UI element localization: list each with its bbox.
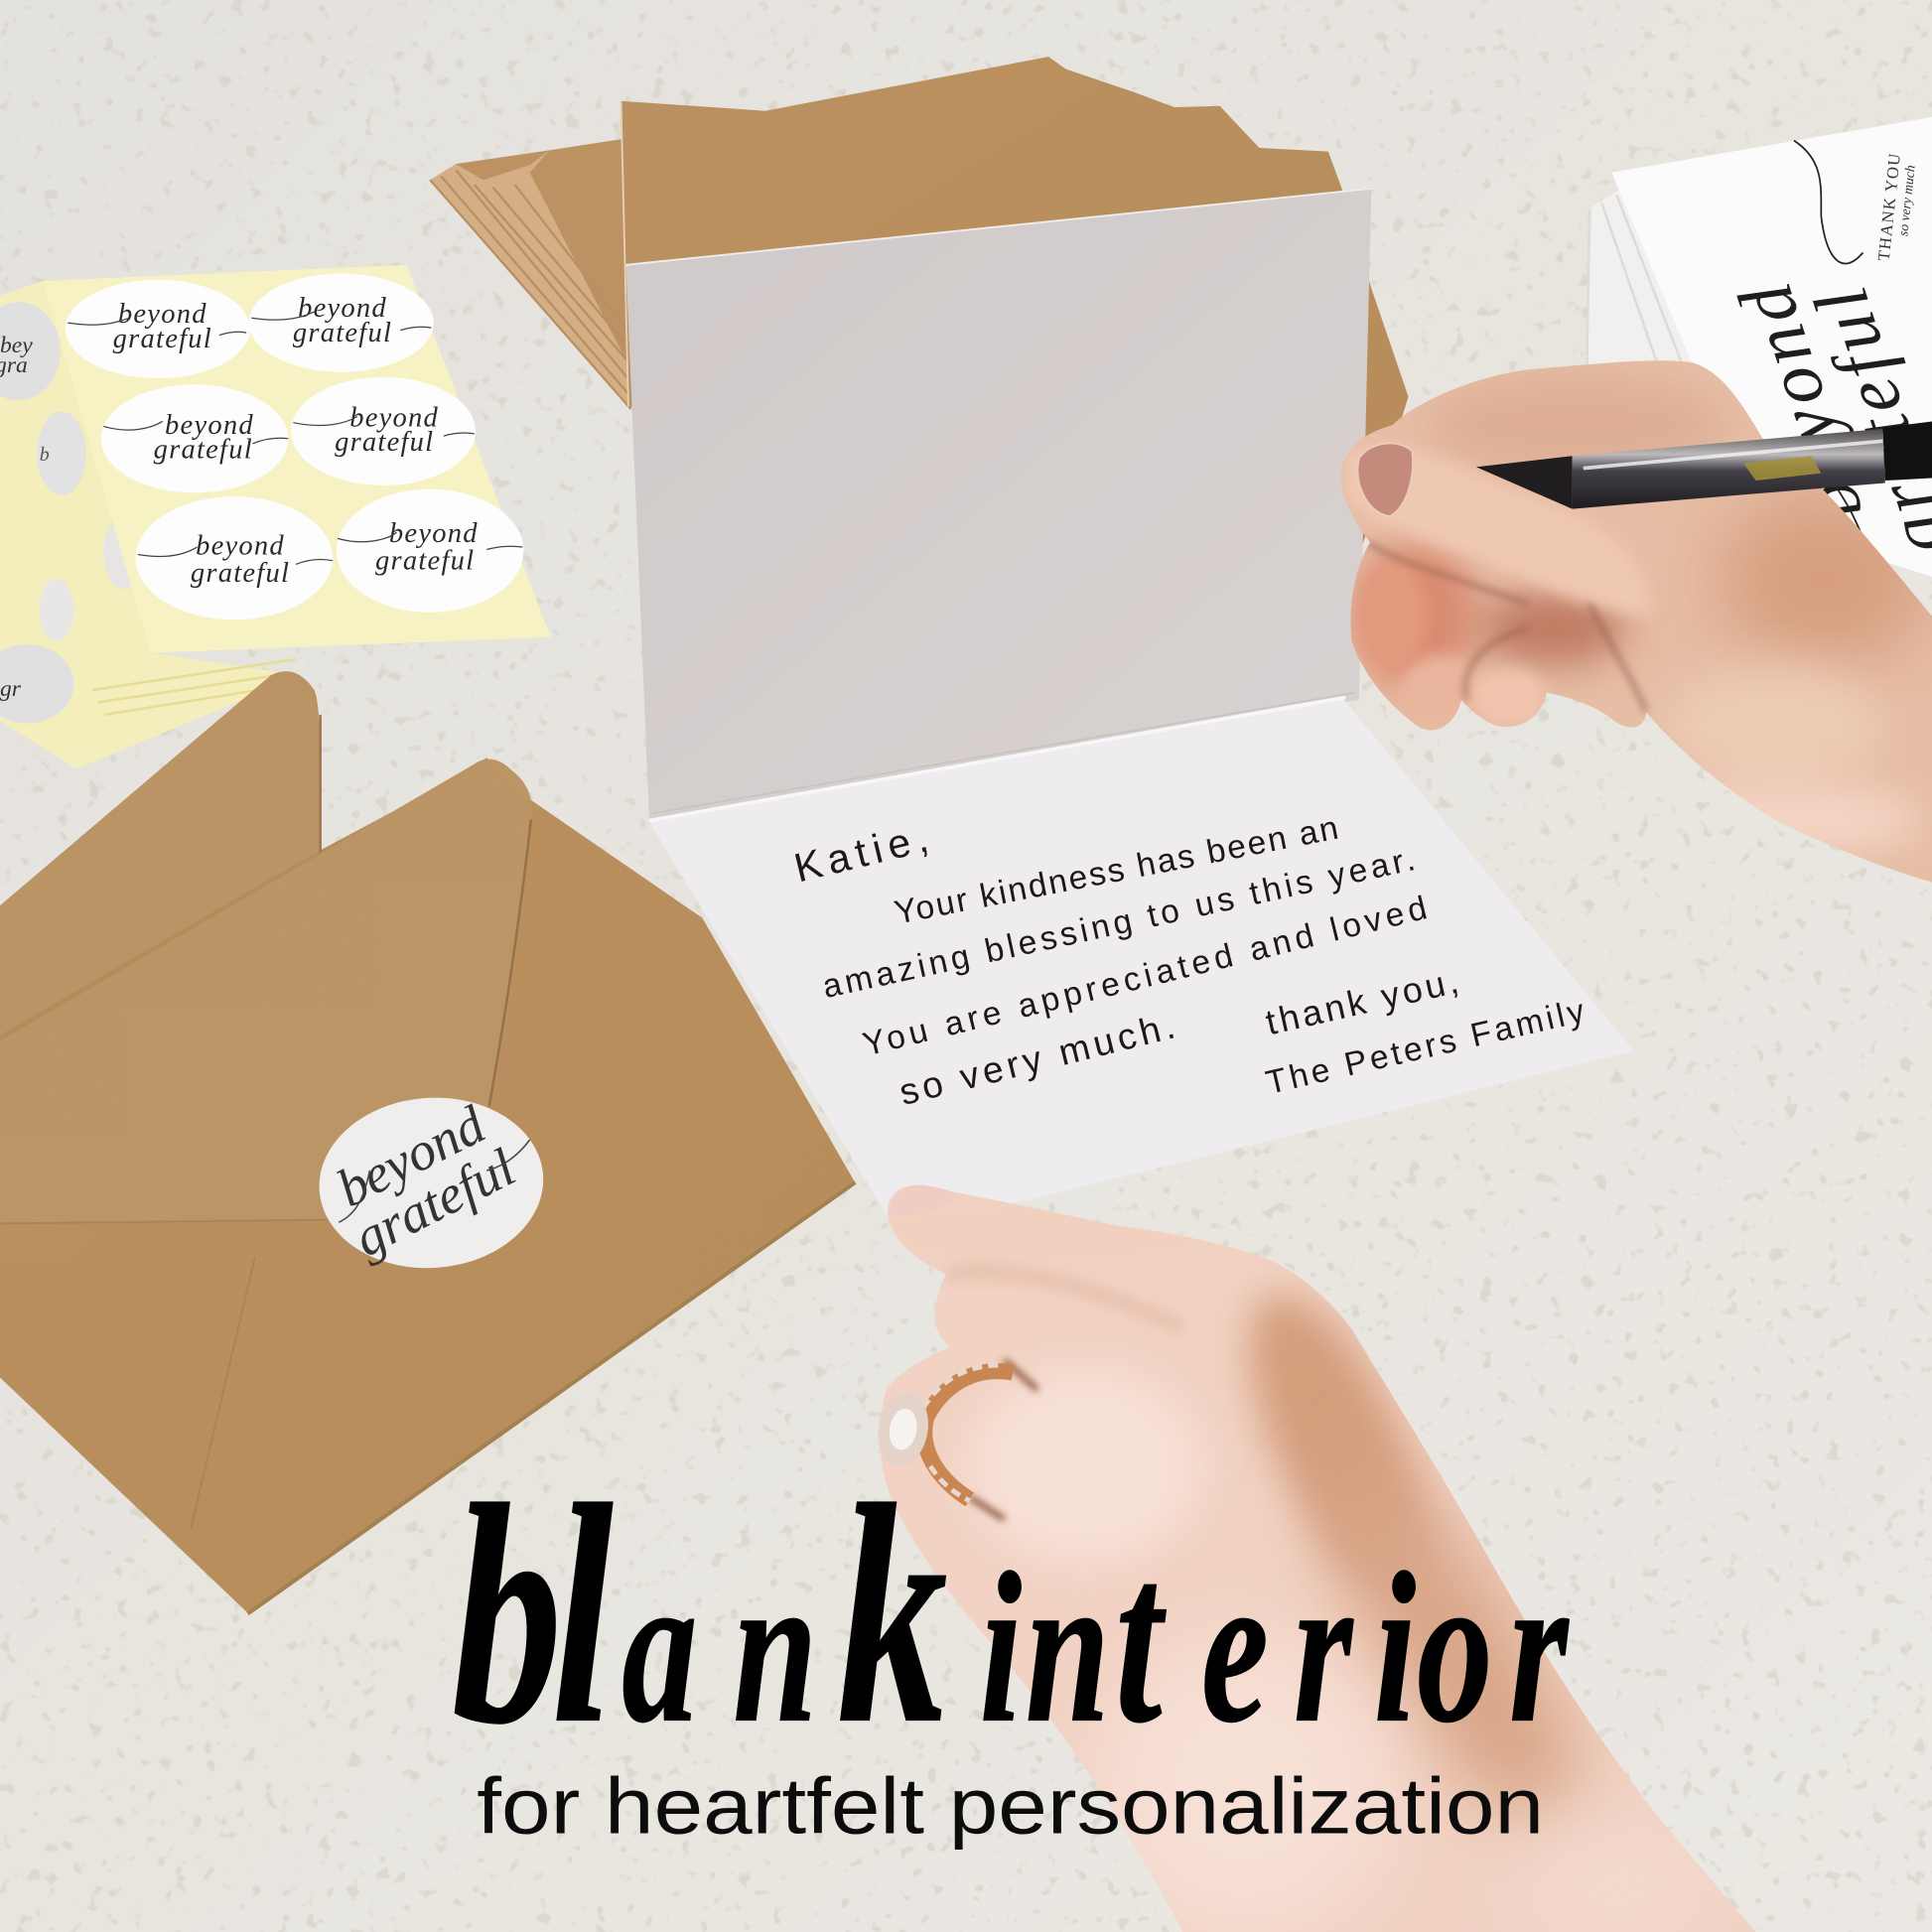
title: blank interior: i bbox=[1374, 1528, 1416, 1767]
card cover lettering bbox=[1736, 284, 1932, 548]
envelope fold lines bbox=[0, 1220, 327, 1528]
sticker swashes bbox=[68, 312, 522, 564]
title: blank interior: l bbox=[552, 1442, 614, 1789]
top sticker sheet bbox=[43, 265, 551, 653]
sticker lettering: grateful bbox=[113, 324, 212, 354]
sticker lettering bbox=[113, 293, 479, 589]
sticker lettering: beyond bbox=[349, 402, 439, 433]
fingernail bbox=[890, 1185, 956, 1216]
stack of white thank-you cards bbox=[1586, 117, 1932, 577]
card cover lettering: beyond bbox=[1721, 269, 1879, 534]
right hand holding pen bbox=[1330, 351, 1932, 894]
title: blank interior: i bbox=[980, 1528, 1022, 1767]
kraft envelopes with sticker seal bbox=[0, 665, 863, 1626]
title: blank interior: k bbox=[838, 1442, 947, 1789]
open greeting card bbox=[625, 189, 1634, 1220]
handwritten note: so very much. bbox=[895, 1004, 1178, 1113]
front envelope body bbox=[0, 758, 854, 1611]
left hand resting on card bbox=[863, 1171, 1774, 1932]
card cover text: THANK YOU bbox=[1874, 151, 1904, 262]
sticker seal bbox=[314, 1090, 549, 1276]
handwritten note: amazing blessing to us this year. bbox=[819, 841, 1419, 1006]
sticker sheet stack bbox=[0, 265, 551, 768]
sticker lettering: beyond bbox=[298, 293, 387, 324]
title: blank interior: o bbox=[1417, 1528, 1492, 1767]
sticker lettering: grateful bbox=[375, 545, 475, 576]
subtitle: for heartfelt personalization bbox=[477, 1762, 1544, 1851]
title: blank interior: r bbox=[1294, 1528, 1354, 1767]
title: blank interior: n bbox=[733, 1528, 817, 1767]
finger gaps bbox=[1368, 542, 1646, 712]
handwritten note: Your kindness has been an bbox=[892, 810, 1341, 932]
thumbnail bbox=[1357, 443, 1413, 516]
partial sticker text on lower sheets: bey bbox=[0, 333, 33, 358]
under sheets bbox=[0, 281, 302, 768]
title: blank interior: t bbox=[1115, 1507, 1167, 1773]
sticker sheet stack: b bbox=[40, 444, 50, 466]
back envelope bbox=[0, 671, 530, 1109]
card lower panel bbox=[649, 699, 1634, 1220]
sticker lettering: beyond bbox=[165, 410, 254, 441]
sticker lettering: beyond bbox=[118, 299, 207, 330]
fingers shading bbox=[1355, 542, 1478, 690]
sticker sheet stack: gr bbox=[0, 676, 22, 702]
kraft envelope stack behind the card bbox=[430, 57, 1409, 548]
thumb bbox=[1343, 446, 1651, 617]
rose gold ring bbox=[873, 1365, 1013, 1501]
pen bbox=[1476, 421, 1932, 509]
handwritten note: The Peters Family bbox=[1263, 993, 1588, 1102]
card upper panel bbox=[625, 189, 1371, 822]
sticker lettering: beyond bbox=[389, 518, 479, 549]
title: blank interior: b bbox=[452, 1442, 562, 1789]
sticker lettering: beyond bbox=[196, 530, 285, 561]
handwritten note: thank you, bbox=[1262, 960, 1462, 1042]
sticker lettering: grateful bbox=[335, 427, 434, 458]
sticker seal lettering: grateful bbox=[344, 1137, 524, 1268]
title: blank interior: e bbox=[1201, 1528, 1269, 1767]
sticker lettering: grateful bbox=[154, 435, 253, 466]
title: blank interior: r bbox=[1509, 1528, 1570, 1767]
title: blank interior: a bbox=[621, 1528, 697, 1767]
front envelope flap bbox=[0, 759, 532, 1223]
card cover text bbox=[1874, 151, 1918, 262]
handwritten note bbox=[790, 810, 1588, 1113]
sticker lettering: grateful bbox=[293, 318, 392, 348]
card cover text: so very much bbox=[1895, 164, 1918, 237]
round stickers bbox=[66, 274, 523, 620]
sticker seal lettering bbox=[321, 1090, 524, 1268]
handwritten note: You are appreciated and loved bbox=[860, 890, 1431, 1063]
title: blank interior: n bbox=[1026, 1528, 1110, 1767]
handwritten note: Katie, bbox=[790, 815, 932, 891]
sticker lettering: grateful bbox=[191, 558, 290, 589]
sticker seal lettering: beyond bbox=[328, 1093, 494, 1218]
back of hand shading bbox=[1719, 492, 1928, 665]
card swash bbox=[1794, 140, 1863, 532]
